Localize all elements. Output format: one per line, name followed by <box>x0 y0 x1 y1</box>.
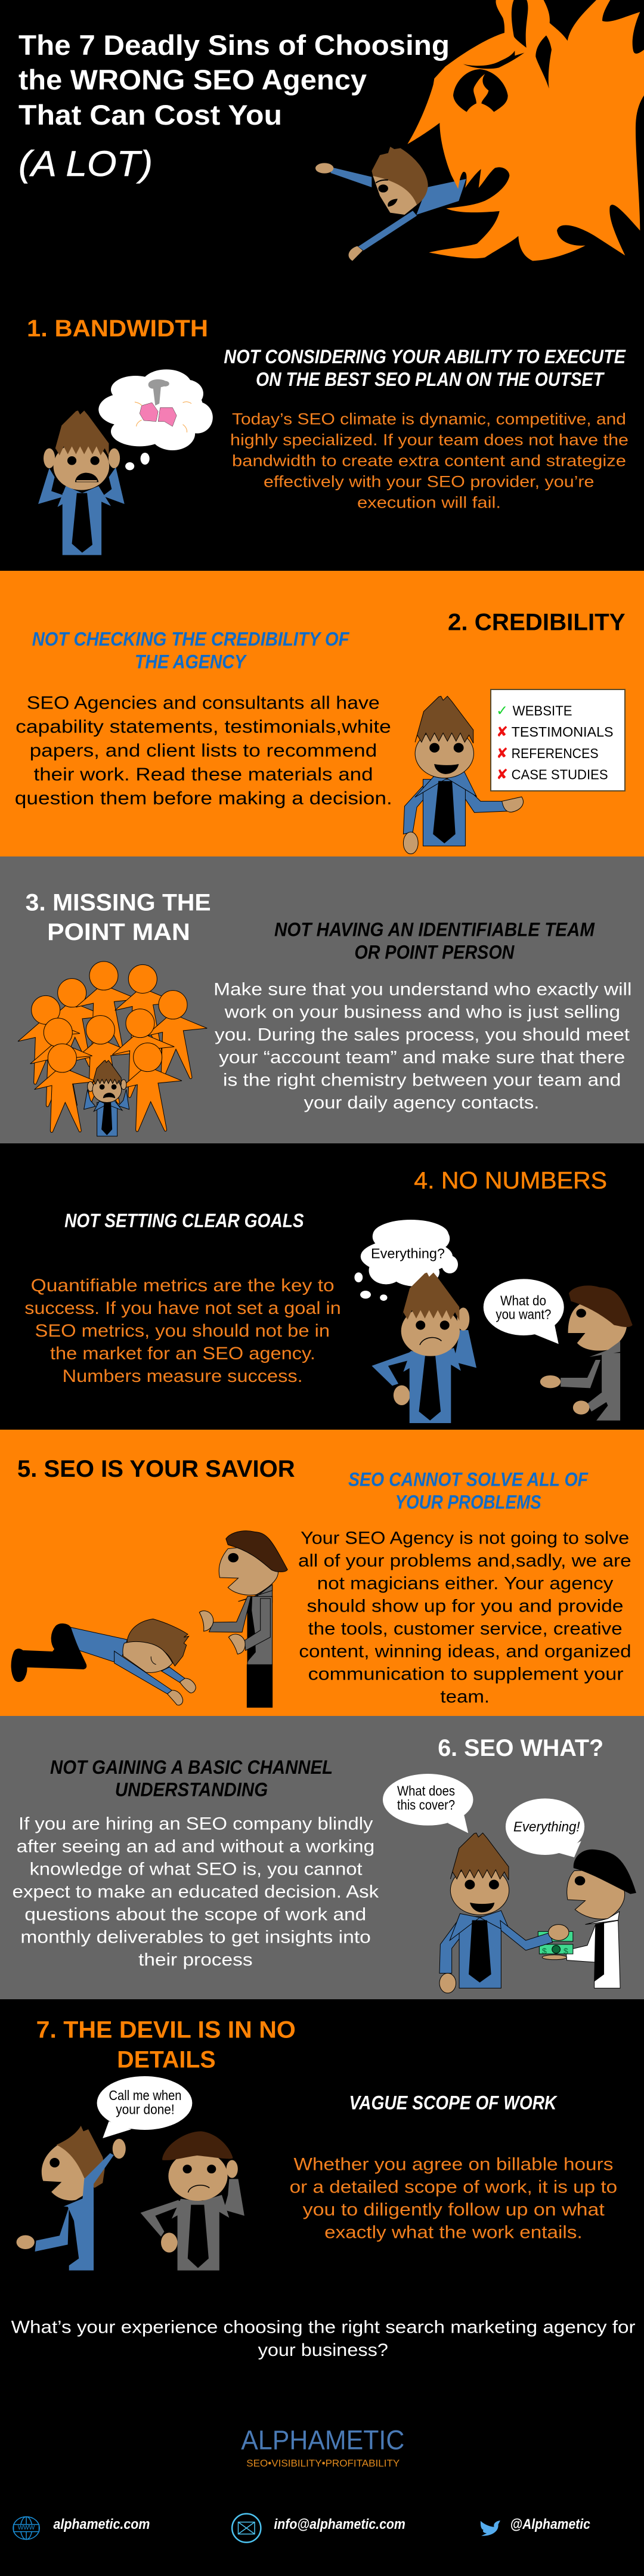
subheading <box>32 628 350 673</box>
icon: man torso in monster mouth <box>416 179 466 215</box>
body text: their process <box>138 1950 253 1970</box>
body text <box>15 692 392 808</box>
title: The 7 Deadly Sins of Choosing <box>18 29 450 61</box>
panel: 7 the devil is in no details <box>17 2017 617 2271</box>
icon: crowd surrounding small man <box>18 961 207 1136</box>
speech bubble text: Call me when <box>109 2088 181 2103</box>
body text: questions about the scope of work and <box>24 1905 366 1925</box>
panel: 6 seo what <box>0 1716 644 1999</box>
subheading: SEO CANNOT SOLVE ALL OF <box>348 1469 589 1490</box>
title: (A LOT) <box>18 144 153 184</box>
heading: DETAILS <box>117 2047 216 2073</box>
logo <box>241 2425 404 2469</box>
body text: communication to supplement your <box>308 1664 624 1684</box>
body text: content, winning ideas, and organized <box>299 1641 631 1661</box>
body text: after seeing an ad and without a working <box>17 1837 374 1857</box>
panel: footer <box>11 2318 636 2543</box>
icon: agent asking question <box>484 1279 633 1421</box>
icon: stressed man with thought cloud <box>38 369 213 555</box>
orange band <box>0 571 644 856</box>
body text: is the right chemistry between your team and <box>223 1070 621 1090</box>
icon: agent standing over fallen client <box>11 1597 273 1708</box>
checklist: ✘ <box>496 723 508 740</box>
website label: alphametic.com <box>54 2516 150 2532</box>
speech bubble text <box>109 2088 181 2117</box>
speech text: you want? <box>496 1307 551 1322</box>
website label <box>18 2516 150 2532</box>
icon: orange monster <box>407 0 644 261</box>
body text: your daily agency contacts. <box>304 1093 539 1112</box>
body text: all of your problems and,sadly, we are <box>298 1551 631 1570</box>
icon: twitter bird <box>481 2521 500 2536</box>
checklist: WEBSITE <box>513 703 572 718</box>
icon: confused client with thought cloud <box>354 1220 476 1423</box>
body text: If you are hiring an SEO company blindly <box>18 1814 373 1834</box>
subheading: NOT SETTING CLEAR GOALS <box>64 1210 304 1231</box>
icon: envelope <box>232 2514 261 2543</box>
body text <box>213 979 631 1112</box>
panel: 1 bandwidth <box>27 316 628 555</box>
speech text: What do <box>500 1292 546 1308</box>
icon: client paying agent with speech bubbles <box>383 1774 636 1993</box>
icon: agent head and collar <box>219 1531 287 1603</box>
checklist: ✘ <box>496 766 508 783</box>
icon: agent walking away from client <box>17 2076 244 2271</box>
body text: Whether you agree on billable hours <box>293 2154 613 2174</box>
body text: work on your business and who is just selling <box>224 1002 620 1022</box>
speech bubble text <box>397 1783 580 1956</box>
heading: 7. THE DEVIL IS IN NO <box>36 2017 296 2043</box>
body text: monthly deliverables to get insights into <box>20 1928 371 1947</box>
speech bubble text: this cover? <box>397 1797 455 1813</box>
body text: SEO metrics, you should not be in <box>35 1321 330 1341</box>
panel: 5 seo is your savior <box>0 1430 644 1716</box>
body text: the tools, customer service, creative <box>308 1619 623 1638</box>
subheading: UNDERSTANDING <box>115 1779 268 1801</box>
title <box>18 29 450 184</box>
subheading <box>224 346 626 390</box>
heading: 5. SEO IS YOUR SAVIOR <box>17 1456 295 1482</box>
body text <box>298 1528 631 1706</box>
body text: exactly what the work entails. <box>324 2222 583 2242</box>
heading <box>26 890 211 945</box>
logo: ALPHAMETIC <box>241 2425 404 2456</box>
subheading: ON THE BEST SEO PLAN ON THE OUTSET <box>256 369 605 390</box>
body text: Quantifiable metrics are the key to <box>31 1276 335 1295</box>
icon: globe <box>13 2517 39 2540</box>
body text: execution will fail. <box>357 494 501 512</box>
subheading: NOT GAINING A BASIC CHANNEL <box>50 1756 333 1778</box>
icon: happy man pointing <box>403 696 523 854</box>
checklist: CASE STUDIES <box>512 767 608 783</box>
gray band <box>0 1716 644 1999</box>
checklist: ✘ <box>496 745 508 762</box>
body text: or a detailed scope of work, it is up to <box>290 2177 617 2197</box>
body text: papers, and client lists to recommend <box>30 740 377 760</box>
orange band <box>0 1430 644 1716</box>
body text <box>24 1276 341 1386</box>
body text: should show up for you and provide <box>306 1596 624 1616</box>
heading: 1. BANDWIDTH <box>27 316 208 342</box>
subheading: YOUR PROBLEMS <box>395 1491 541 1513</box>
title: That Can Cost You <box>18 99 282 131</box>
heading <box>36 2017 296 2073</box>
subheading <box>274 919 595 963</box>
subheading: THE AGENCY <box>135 651 247 673</box>
body text: knowledge of what SEO is, you cannot <box>30 1860 363 1879</box>
heading: 3. MISSING THE <box>26 890 211 916</box>
subheading <box>50 1756 333 1801</box>
logo: SEO•VISIBILITY•PROFITABILITY <box>246 2457 400 2469</box>
subheading: NOT HAVING AN IDENTIFIABLE TEAM <box>274 919 595 940</box>
speech bubble text: Everything! <box>513 1819 580 1835</box>
body text: Today’s SEO climate is dynamic, competitive, and <box>232 410 626 428</box>
closing question <box>11 2318 636 2360</box>
icon: falling man <box>315 147 428 261</box>
gray band <box>0 856 644 1143</box>
body text: Make sure that you understand who exactly will <box>213 979 631 999</box>
speech bubble text: What does <box>397 1783 455 1799</box>
subheading: OR POINT PERSON <box>354 941 515 963</box>
speech text <box>496 1292 551 1322</box>
heading: 2. CREDIBILITY <box>448 610 626 636</box>
panel: 3 missing the point man <box>0 856 644 1143</box>
checklist <box>491 689 625 791</box>
twitter label: @Alphametic <box>510 2516 590 2532</box>
body text: your “account team” and make sure that there <box>219 1047 625 1067</box>
closing question: What’s your experience choosing the right search marketing agency for <box>11 2318 636 2337</box>
panel: 4 no numbers <box>24 1167 633 1423</box>
checklist: TESTIMONIALS <box>512 724 614 740</box>
subheading <box>348 1469 589 1513</box>
body text: highly specialized. If your team does not have the <box>230 431 628 449</box>
body text: the market for an SEO agency. <box>50 1344 315 1363</box>
speech bubble text: $ <box>564 1946 568 1956</box>
body text: not magicians either. Your agency <box>317 1573 613 1593</box>
body text: SEO Agencies and consultants all have <box>27 692 380 713</box>
body text: you to diligently follow up on what <box>303 2200 605 2219</box>
panel: 2 credibility <box>0 571 644 856</box>
checklist: REFERENCES <box>512 746 599 761</box>
closing question: your business? <box>258 2340 388 2360</box>
speech bubble and cloud text: Everything? <box>371 1245 445 1261</box>
heading: POINT MAN <box>47 919 190 945</box>
body text: their work. Read these materials and <box>33 763 373 784</box>
email label: info@alphametic.com <box>274 2516 405 2532</box>
body text: effectively with your SEO provider, you’re <box>264 473 594 491</box>
body text: expect to make an educated decision. Ask <box>13 1882 379 1902</box>
heading: 6. SEO WHAT? <box>438 1735 603 1761</box>
body text: question them before making a decision. <box>15 787 392 808</box>
heading: 4. NO NUMBERS <box>414 1167 607 1193</box>
subheading: NOT CHECKING THE CREDIBILITY OF <box>32 628 350 650</box>
subheading: VAGUE SCOPE OF WORK <box>349 2092 558 2114</box>
body text <box>290 2154 617 2242</box>
title: the WRONG SEO Agency <box>18 64 367 95</box>
panel: header <box>18 0 644 261</box>
website label: WWW <box>18 2525 35 2531</box>
body text: Numbers measure success. <box>63 1366 303 1386</box>
body text <box>230 410 628 512</box>
body text <box>13 1814 379 1970</box>
body text: team. <box>440 1687 490 1706</box>
body text: bandwidth to create extra content and strategize <box>232 452 626 470</box>
body text: Your SEO Agency is not going to solve <box>301 1528 629 1548</box>
body text: you. During the sales process, you should meet <box>215 1025 630 1044</box>
body text: capability statements, testimonials,white <box>16 716 391 737</box>
checklist: ✓ <box>496 702 508 719</box>
speech bubble text: your done! <box>116 2101 175 2117</box>
speech bubble text: $ <box>542 1946 547 1956</box>
body text: success. If you have not set a goal in <box>24 1298 341 1318</box>
